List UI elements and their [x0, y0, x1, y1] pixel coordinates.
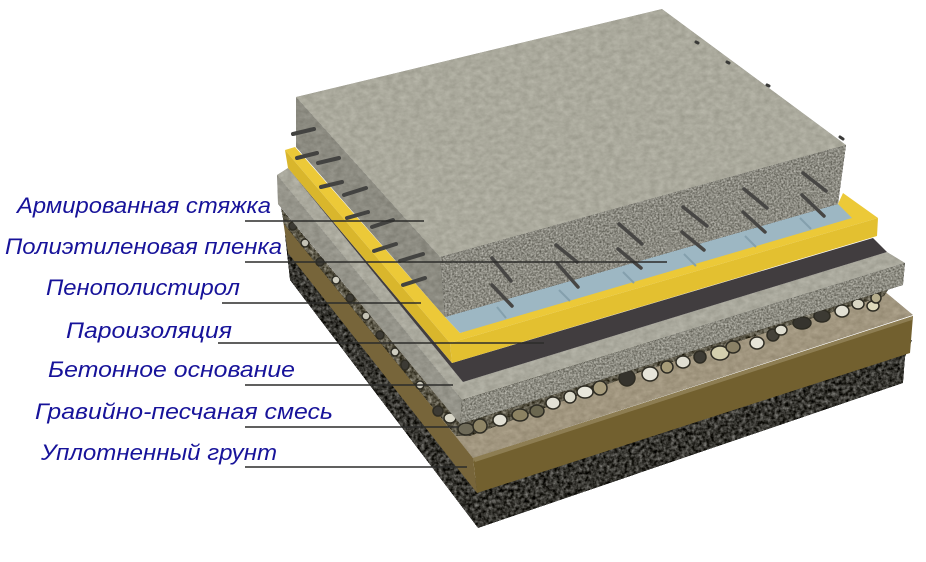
- leader lines: [218, 221, 667, 467]
- rebar rods: left side: [293, 129, 425, 285]
- label: concrete base: Бетонное основание: [48, 357, 295, 382]
- layer: reinforced screed: [296, 9, 846, 317]
- layer: gravel-sand mix: [281, 208, 900, 436]
- layer: vapor barrier: [288, 168, 887, 382]
- gravel stones: [289, 222, 881, 435]
- layer: polyethylene film: [445, 204, 852, 333]
- label: polyethylene film: Полиэтиленовая пленка: [5, 234, 282, 259]
- layer: concrete base: [277, 168, 905, 424]
- layer: sand and brown base: [283, 218, 913, 493]
- label: reinforced screed: Армированная стяжка: [15, 193, 271, 218]
- label: gravel-sand mix: Гравийно-песчаная смесь: [35, 399, 333, 424]
- label: vapor barrier: Пароизоляция: [66, 318, 232, 343]
- rebar rods: front side: [492, 173, 826, 306]
- layer: polystyrene foam: [285, 147, 878, 363]
- label: compacted soil: Уплотненный грунт: [40, 440, 277, 465]
- label: polystyrene foam: Пенополистирол: [46, 275, 240, 300]
- rebar rods: far side: [696, 42, 843, 139]
- layer: compacted soil: [285, 235, 912, 528]
